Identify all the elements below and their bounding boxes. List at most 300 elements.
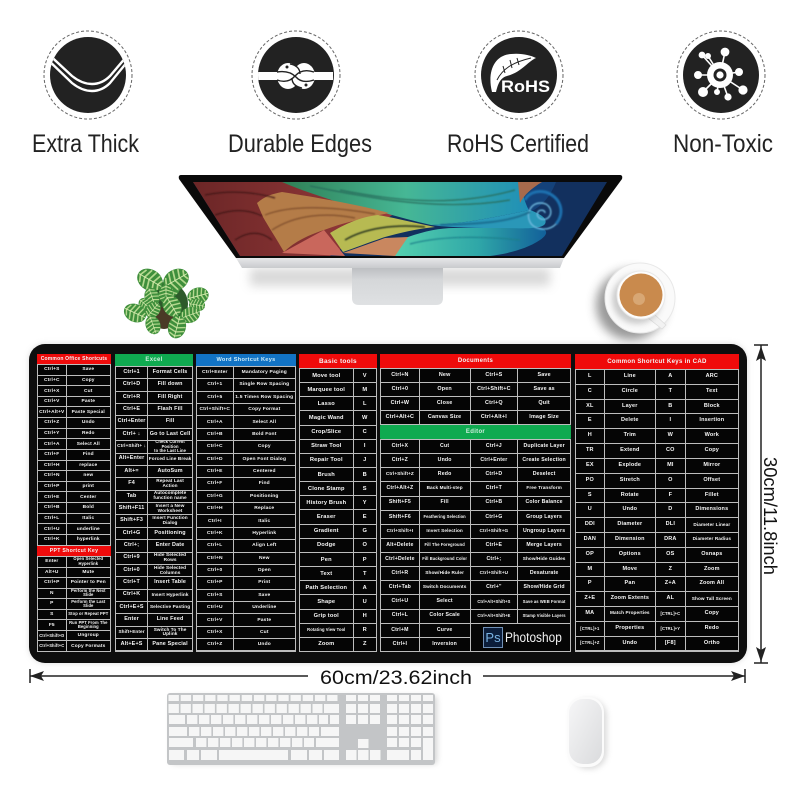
panel: excel [115,354,193,652]
table: excel shortcuts: Ctrl+E+S [119,604,144,610]
table: documents shortcuts: Ctrl+N [391,372,409,378]
table: office shortcuts: underline [77,527,100,532]
table: CAD shortcuts: Extend [620,447,640,453]
table: CAD shortcuts: Diameter [617,521,642,527]
heading: common shortcut keys in CAD: Common Shortcut Keys in CAD [607,358,707,365]
table: basic tools: V [363,373,367,379]
table: editor shortcuts: Ctrl+Shift+Z [386,471,414,476]
table: CAD shortcuts: Zoom All [699,580,724,586]
table: CAD shortcuts: Show Tall Screen [692,596,732,601]
heading: editor [380,425,571,439]
table: CAD shortcuts: W [668,432,673,438]
table: basic tools: C [363,429,367,435]
table: basic tools: P [363,557,367,563]
table: word shortcuts: Ctrl+0 [207,568,222,573]
table: basic tools: W [362,415,368,421]
table: excel shortcuts: Enter [124,616,139,622]
monitor bezel [179,175,622,258]
table: word shortcuts: Open Font Dialog [242,457,286,462]
table: documents shortcuts: Ctrl+Alt+C [386,414,414,420]
panel: documents and editor [380,354,571,652]
table: CAD shortcuts: F [669,492,672,498]
table: editor shortcuts: Ctrl+Alt+Z [386,485,413,491]
table: CAD shortcuts: [CTRL]+Z [580,640,599,645]
table: office shortcuts: Paste Special [72,410,105,415]
table: CAD shortcuts: DLI [666,521,675,527]
table: editor shortcuts: Ctrl+Shift+I [387,528,413,533]
illustration: mouse [567,697,607,769]
table: excel shortcuts: Alt+= [124,468,139,474]
table: CAD shortcuts: Line [624,373,636,379]
table: basic tools: History Brush [306,500,346,506]
table: editor shortcuts: Shift+F5 [389,499,411,505]
table: word shortcuts: Underline [252,605,276,610]
table: editor shortcuts: Desaturate [530,570,558,576]
table: word shortcuts: Save [258,593,270,598]
table: CAD shortcuts: Delete [621,417,639,423]
table: basic tools: M [362,387,367,393]
table: documents shortcuts: Ctrl+Alt+I [481,414,507,420]
table: ppt shortcuts: P [50,601,54,606]
table: editor shortcuts: Select [436,598,453,604]
table: office shortcuts: Ctrl+N [44,473,60,478]
table: excel shortcuts: Ctrl+E [123,406,140,412]
table: ppt shortcuts: Ctrl+Shift+D [39,632,64,638]
table: office shortcuts: hyperlink [77,537,100,542]
table: excel shortcuts: Hide Selected Rows [154,553,186,562]
table: basic tools: U [363,599,367,605]
table: CAD shortcuts: EX [586,462,594,468]
table: CAD shortcuts: Insertion [699,417,724,423]
table: excel shortcuts: Ctrl+K [123,591,140,597]
table: word shortcuts: Ctrl+Z [207,642,222,647]
monitor wallpaper [190,180,610,258]
height dimension arrow [754,345,780,663]
table: office shortcuts: Ctrl+S [44,367,59,372]
table: CAD shortcuts: OP [586,551,594,557]
table: office shortcuts: Ctrl+Z [44,420,59,425]
table: office shortcuts: Cut [84,389,93,394]
table: editor shortcuts: Ctrl+I [393,641,407,647]
table: excel shortcuts: Selective Pasting [150,604,190,609]
table: CAD shortcuts: Diameter Linear [693,522,730,527]
table: ppt shortcuts: Mute [82,570,94,575]
table: basic tools: Straw Tool [311,443,342,449]
table: basic tools: Text [320,571,332,577]
table: ppt shortcuts: Ungroup [78,633,99,638]
table: word shortcuts: Hyperlink [252,531,276,536]
table: editor shortcuts: Ctrl+D [485,471,502,477]
heading: excel [115,354,193,366]
table: editor shortcuts: Color Balance [526,499,563,505]
table: basic tools: Lasso [318,401,335,407]
table: excel shortcuts: Ctrl+ ↓ [123,431,141,437]
table: excel shortcuts: Ctrl+Enter [118,418,146,424]
table: editor shortcuts [380,439,571,652]
table: basic tools: Shape [317,599,335,605]
table: excel shortcuts: Switch To The Uplink [154,627,186,636]
table: excel shortcuts: Ctrl+Shift+ ↓ [117,443,146,448]
panel: basic tools [299,354,377,652]
table: basic tools: J [363,457,366,463]
table: excel shortcuts: Fill down [158,381,183,387]
table: word shortcuts: Ctrl+Shift+C [199,407,230,412]
table: ppt shortcuts: Ctrl+P [44,580,59,585]
icon: non-toxic [677,31,765,119]
table: office shortcuts: Italic [82,516,94,521]
table: ppt shortcuts [37,556,111,652]
table: excel shortcuts: Flash Fill [157,406,183,412]
table: word shortcuts: Print [258,580,270,585]
table: ppt shortcuts: F5 [49,623,55,628]
table: word shortcuts: Ctrl+K [207,531,223,536]
table: office shortcuts: replace [79,463,97,468]
table: editor shortcuts: Fill The Foreground [424,542,465,547]
table: CAD shortcuts: Offset [703,477,720,483]
table: excel shortcuts: Insert Function Dialog [152,515,188,525]
table: editor shortcuts: Back Multi-step [427,485,463,490]
table: basic tools: Path Selection [305,585,347,591]
table: word shortcuts: Ctrl+G [207,494,223,499]
illustration: coffee cup [596,263,675,340]
table: editor shortcuts: Ctrl+G [485,514,502,520]
heading: word shortcut keys: Word Shortcut Keys [216,357,276,363]
table: editor shortcuts: Show/Hide Guides [523,556,566,561]
table: CAD shortcuts: Diameter Radius [693,536,731,541]
table: excel shortcuts: Insert Hyperlink [152,592,189,597]
table: office shortcuts: Center [80,495,96,500]
table: basic tools: Brush [318,472,335,478]
table: CAD shortcuts: Copy [705,610,719,616]
table: CAD shortcuts: [CTRL]+Y [661,626,680,631]
table: editor shortcuts: Invert Selection [426,528,463,533]
table: editor shortcuts: Curve [437,627,452,633]
table: word shortcuts: Copy [258,444,271,449]
illustration: desktop monitor [179,175,622,305]
heading: excel: Excel [145,357,163,363]
table: excel shortcuts: Autocomplete function name [153,491,187,500]
table: CAD shortcuts: A [668,373,672,379]
table: basic tools: Clone Stamp [308,486,345,492]
table: excel shortcuts: Ctrl+9 [123,554,140,560]
table: editor shortcuts: Ctrl+; [486,556,501,562]
table: CAD shortcuts: H [588,432,592,438]
table: ppt shortcuts: N [50,591,54,596]
table: excel shortcuts: Insert Table [154,579,186,585]
table: word shortcuts: Ctrl+U [207,605,223,610]
table: ppt shortcuts: Alt+U [45,570,59,575]
table: CAD shortcuts: B [668,403,672,409]
table: CAD shortcuts: DAN [584,536,596,542]
table: excel shortcuts: Insert a New Worksheet [156,503,184,513]
table: basic tools: A [363,585,367,591]
table: CAD shortcuts: Redo [705,625,719,631]
table: word shortcuts: Ctrl+C [207,444,223,449]
table: office shortcuts: Ctrl+U [44,527,60,532]
table: CAD shortcuts: Zoom Extents [611,595,649,601]
table: CAD shortcuts: CO [666,447,675,453]
table: editor shortcuts: Feathering Selection [424,514,466,519]
table: CAD shortcuts: DDI [585,521,595,527]
table: CAD shortcuts: Dimension [615,536,645,542]
table: excel shortcuts: Ctrl+T [123,579,140,585]
icon: durable edges [252,31,340,119]
label: non-toxic: Non-Toxic [673,130,773,158]
table: CAD shortcuts: Mirror [703,462,720,468]
table: office shortcuts: Ctrl+L [44,516,59,521]
table: editor shortcuts: Cut [440,443,449,449]
table: basic tools: Gradient [314,528,339,534]
table: editor shortcuts: Merge Layers [526,542,562,548]
table: CAD shortcuts [575,369,739,652]
table: excel shortcuts: Ctrl+1 [123,369,140,375]
table: documents shortcuts: New [439,372,450,378]
table: basic tools: B [363,472,367,478]
table: CAD shortcuts: Undo [622,506,637,512]
table: excel shortcuts: Go to Last Cell [150,431,190,437]
table: documents shortcuts: Ctrl+Q [485,400,503,406]
table: word shortcuts: Ctrl+D [207,457,223,462]
table: excel shortcuts: Alt+E+S [121,641,143,647]
table: office shortcuts: Ctrl+E [44,495,59,500]
table: editor shortcuts: Save as WEB Format [523,599,566,604]
table: excel shortcuts: Shift+F3 [120,517,143,523]
table: editor shortcuts: Inversion [432,641,457,647]
heading: ppt shortcut key [37,546,111,556]
table: editor shortcuts: Ctrl+Shift+U [480,570,508,575]
table: editor shortcuts: Ctrl+Enter [480,457,507,463]
table: editor shortcuts: Ctrl+E [486,542,502,548]
table: documents shortcuts: Ctrl+W [391,400,409,406]
table: excel shortcuts: Alt+Enter [119,455,144,461]
illustration: keyboard [167,693,437,765]
table: documents shortcuts: Canvas Size [428,414,461,420]
table: editor shortcuts: Ctrl+M [391,627,409,633]
table: editor shortcuts: Stamp Visible Layers [523,613,566,618]
table: documents shortcuts: Open [437,386,452,392]
table: editor shortcuts: Show/Hide Grid [524,584,565,590]
table: word shortcuts: Ctrl+E [207,469,223,474]
table: office shortcuts: Ctrl+B [44,505,60,510]
table: editor shortcuts: Create Selection [522,457,566,463]
table: CAD shortcuts: C [588,388,592,394]
table: CAD shortcuts: P [588,580,592,586]
heading: common office shortcuts: Common Office Shortcuts [41,356,107,362]
table: documents shortcuts: Ctrl+0 [392,386,408,392]
table: basic tools: S [363,486,367,492]
table: word shortcuts: Centered [253,469,276,474]
table: ppt shortcuts: Enter [45,559,58,564]
table: CAD shortcuts: Work [705,432,719,438]
table: word shortcuts: Italic [258,519,270,524]
table: CAD shortcuts: U [588,506,592,512]
table: excel shortcuts: Ctrl+R [123,394,140,400]
table: basic tools: Zoom [318,641,334,647]
table: office shortcuts: new [83,473,93,478]
table: basic tools: T [363,571,367,577]
table: editor shortcuts: Ctrl+Tab [389,584,411,590]
table: editor shortcuts: Ctrl+X [392,443,408,449]
table: CAD shortcuts: Trim [624,432,636,438]
illustration: potted plant [121,264,211,340]
table: basic tools: Magic Wand [309,415,344,421]
table: basic tools: Repair Tool [310,457,343,463]
table: CAD shortcuts: Move [622,566,637,572]
table: CAD shortcuts: Fillet [705,492,719,498]
table: office shortcuts [37,364,111,546]
table: ppt shortcuts: Ctrl+Shift+C [39,643,64,648]
table: office shortcuts: Find [83,452,94,457]
table: basic tools [299,368,377,652]
height dimension arrow: 30cm/11.8inch [760,457,780,575]
table: word shortcuts: Paste [257,618,271,622]
label: durable edges: Durable Edges [228,130,372,158]
table: editor shortcuts: Ctrl+Alt+Shift+E [477,613,510,618]
icon: RoHS: RoHS [501,77,550,96]
table: office shortcuts: Ctrl+K [44,537,60,542]
table: word shortcuts: Undo [258,642,271,647]
label: extra thick: Extra Thick [32,130,139,158]
table: word shortcuts: Ctrl+P [207,580,223,585]
table: word shortcuts: Replace [254,506,274,511]
table: basic tools: Move tool [312,373,340,379]
table: CAD shortcuts: S [588,492,592,498]
table: CAD shortcuts: Stretch [620,477,640,483]
table: ppt shortcuts: Pointer to Pen [71,580,106,585]
table: CAD shortcuts: Osnaps [701,551,722,557]
table: word shortcuts: Ctrl+1 [207,382,222,387]
label: RoHS certified: RoHS Certified [447,130,589,158]
table: excel shortcuts: F4 [128,480,135,486]
desk mat background [29,344,747,663]
table: editor shortcuts: Shift+F6 [389,514,411,520]
table: excel shortcuts: Tab [127,493,136,499]
table: word shortcuts: Ctrl+A [207,420,223,425]
logo: Photoshop: Photoshop [505,630,562,645]
table: editor shortcuts: Alt+Delete [386,542,414,548]
heading: documents [380,354,571,368]
table: editor shortcuts: Deselect [533,471,556,477]
table: basic tools: Dodge [317,542,336,548]
monitor chin [236,258,564,268]
table: CAD shortcuts: Options [619,551,641,557]
heading: documents: Documents [458,358,493,364]
table: office shortcuts: Ctrl+H [44,463,60,468]
panel: office shortcuts [37,354,111,652]
table: basic tools: O [362,542,367,548]
table: CAD shortcuts: L [588,373,592,379]
table: basic tools: R [363,627,367,633]
table: word shortcuts: New [259,556,270,561]
table: CAD shortcuts: M [587,566,592,572]
table: CAD shortcuts: Z+E [584,595,595,601]
table: excel shortcuts: Ctrl+G [123,530,140,536]
table: CAD shortcuts: [CTRL]+1 [580,626,599,631]
table: editor shortcuts: Ctrl+U [391,598,408,604]
table: excel shortcuts: AutoSum [157,468,183,474]
table: excel shortcuts [115,366,193,652]
table: editor shortcuts: Color Scale [429,612,460,618]
table: office shortcuts: Ctrl+A [44,442,60,447]
table: office shortcuts: Ctrl+X [44,389,59,394]
table: ppt shortcuts: S [50,612,54,617]
table: word shortcuts: Positioning [250,494,279,499]
table: editor shortcuts: Ctrl+R [391,570,408,576]
table: editor shortcuts: Switch Documents [423,584,466,589]
table: editor shortcuts: Show/Hide Ruler [425,570,464,575]
table: CAD shortcuts: Ortho [704,640,720,646]
heading: word shortcut keys [196,354,296,366]
table: word shortcuts: Ctrl+X [207,630,223,635]
table: word shortcuts: Ctrl+L [207,543,222,548]
table: word shortcuts: Ctrl+S [207,593,223,598]
table: CAD shortcuts: Z [669,566,672,572]
table: office shortcuts: Bold [83,505,94,510]
table: excel shortcuts: Fill [166,418,174,424]
table: word shortcuts: Ctrl+N [207,556,223,561]
table: word shortcuts: Align Left [252,543,276,548]
table: basic tools: Grip tool [314,613,339,619]
table: CAD shortcuts: Zoom [704,566,720,572]
table: office shortcuts: Ctrl+C [44,378,60,383]
table: editor shortcuts: Redo [438,471,452,477]
table: word shortcuts: Mandatory Paging [242,370,287,375]
table: documents shortcuts [380,368,571,425]
monitor stand [352,266,443,305]
table: word shortcuts: Ctrl+I [208,519,222,524]
table: CAD shortcuts: ARC [706,373,718,379]
table: word shortcuts: Ctrl+F [207,481,222,486]
table: documents shortcuts: Save [537,372,551,378]
table: basic tools: Y [363,500,367,506]
table: excel shortcuts: Shift+Enter [118,629,145,634]
table: CAD shortcuts: Dimensions [695,506,728,512]
table: documents shortcuts: Image Size [529,414,559,420]
table: editor shortcuts: Ctrl+T [486,485,502,491]
table: CAD shortcuts: XL [586,403,594,409]
table: basic tools: Pen [321,557,332,563]
table: CAD shortcuts: TR [586,447,594,453]
logo: Photoshop [483,627,562,648]
table: office shortcuts: Ctrl+F [44,452,59,457]
table: basic tools: Crop/Slice [311,429,341,435]
heading: editor: Editor [466,429,485,435]
table: word shortcuts: Ctrl+V [207,618,223,622]
table: basic tools: I [364,443,366,449]
table: editor shortcuts: Ctrl+" [486,584,502,590]
table: documents shortcuts: Close [437,400,452,406]
table: editor shortcuts: Ctrl+Delete [385,556,415,562]
table: word shortcuts: Copy Format [248,407,280,412]
table: editor shortcuts: Ctrl+L [392,612,408,618]
logo: Photoshop: Ps [485,630,501,645]
table: CAD shortcuts: Properties [615,625,644,631]
table: basic tools: H [363,613,367,619]
table: editor shortcuts: Ungroup Layers [523,528,565,534]
table: editor shortcuts: Fill Background Color [422,556,467,561]
table: office shortcuts: Ctrl+Y [44,431,59,436]
table: word shortcuts: Find [259,481,270,486]
table: office shortcuts: Copy [82,378,95,383]
panel: CAD shortcut keys [575,354,739,652]
table: editor shortcuts: Ctrl+J [486,443,502,449]
table: basic tools: Marquee tool [308,387,345,393]
table: ppt shortcuts: Stop or Repeat PPT [68,611,108,616]
table: CAD shortcuts: Explode [618,462,641,468]
table: word shortcuts: Ctrl+B [207,432,223,437]
table: CAD shortcuts: [F8] [665,640,676,646]
table: word shortcuts: Ctrl+Enter [202,370,228,375]
